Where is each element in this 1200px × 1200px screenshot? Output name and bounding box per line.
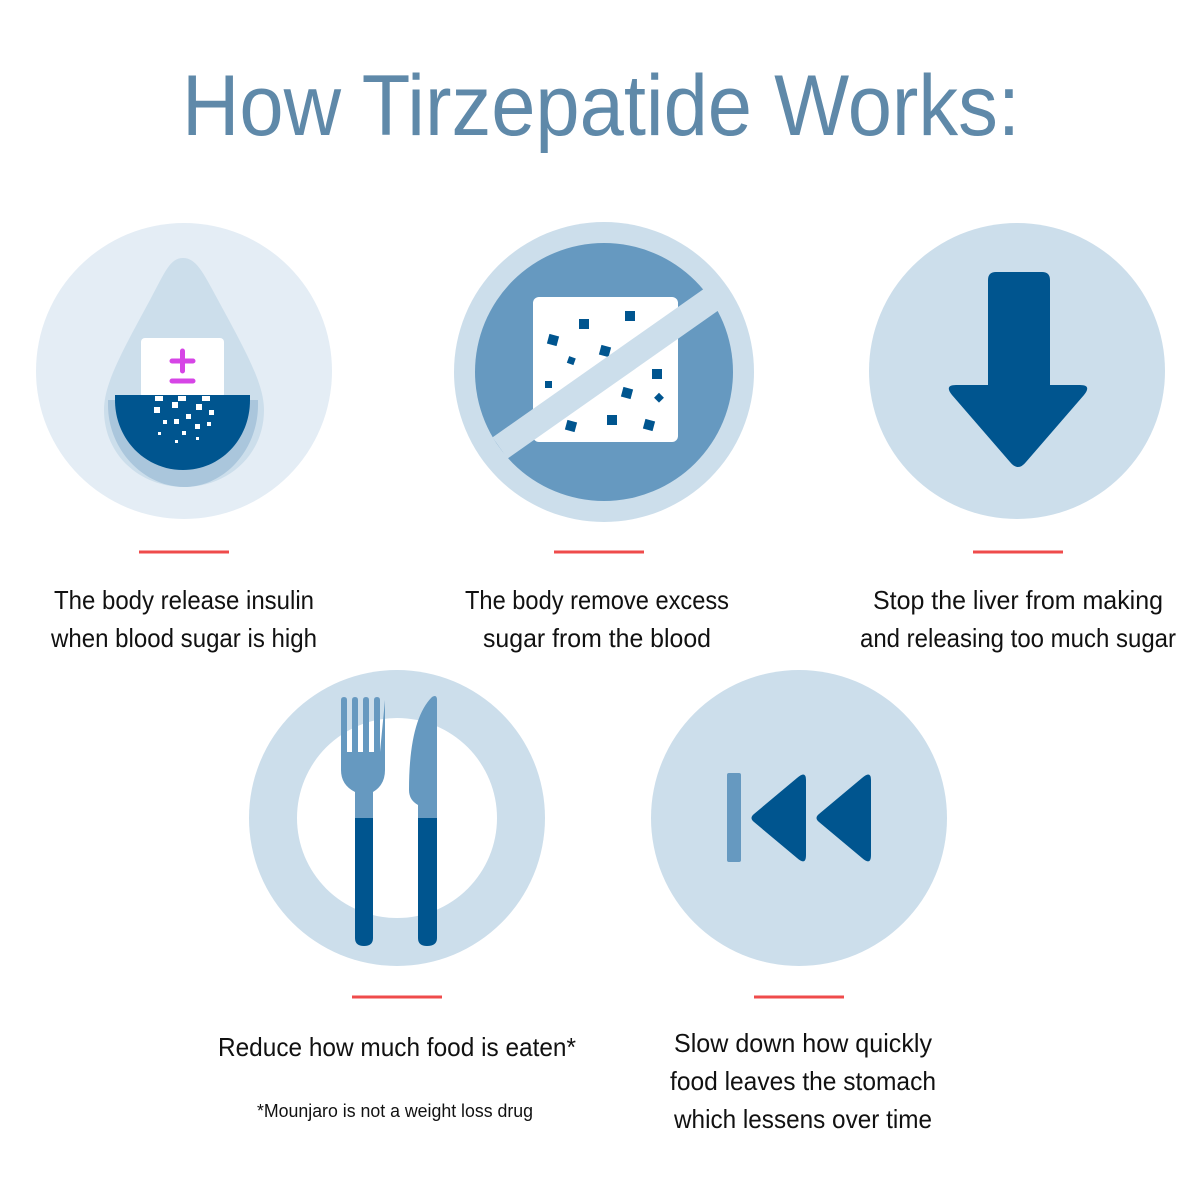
text: liver (860, 585, 1176, 653)
title: How Tirzepatide Works: (182, 58, 1020, 154)
divider: red lines row 1 (139, 550, 1063, 554)
divider: red lines row 2 (352, 996, 844, 998)
text: slow stomach: which lessens over time (673, 1104, 932, 1134)
text: insulin: when blood sugar is high (50, 623, 317, 653)
text: slow stomach: Slow down how quickly (674, 1028, 932, 1058)
text: remove sugar: sugar from the blood (483, 623, 711, 653)
icon: blood drop with insulin (36, 223, 332, 519)
text: liver: and releasing too much sugar (860, 623, 1176, 653)
icon: plate with fork and knife (249, 670, 545, 966)
text: insulin: The body release insulin (54, 585, 314, 615)
icon: rewind (651, 670, 947, 966)
text: remove sugar: The body remove excess (465, 585, 729, 615)
text: reduce food: Reduce how much food is eaten* (218, 1032, 576, 1062)
text: liver: Stop the liver from making (873, 585, 1163, 615)
text: slow stomach: food leaves the stomach (670, 1066, 936, 1096)
icon: no sugar (454, 222, 754, 522)
text: slow stomach (670, 1028, 936, 1134)
footnote: *Mounjaro is not a weight loss drug (257, 1101, 533, 1121)
text: remove sugar (465, 585, 729, 653)
text: insulin (50, 585, 317, 653)
icon: down arrow (869, 223, 1165, 519)
